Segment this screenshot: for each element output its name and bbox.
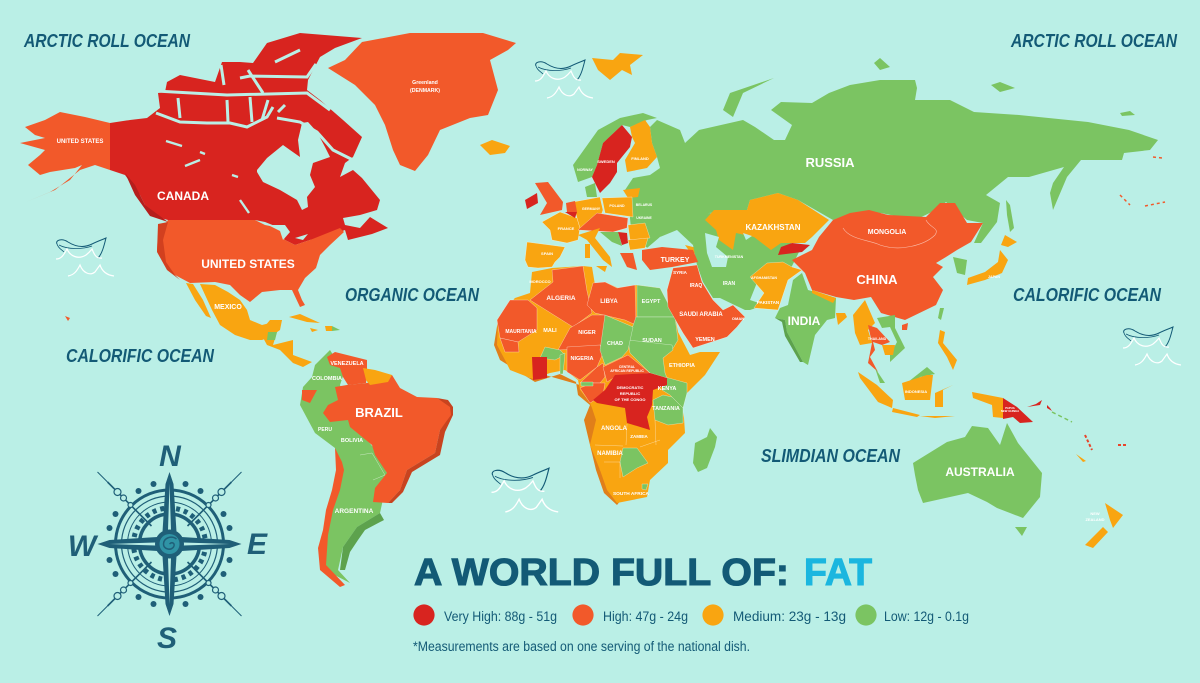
country labels: CHINA: [856, 272, 898, 287]
ocean labels: [23, 31, 1178, 466]
country: Togo: [560, 353, 565, 374]
region: Russia and northern Asia: [625, 58, 1165, 248]
country: Korea: [953, 257, 967, 275]
Arctic islands: [874, 58, 890, 70]
country labels: COLOMBIA: [312, 376, 342, 382]
Solomon Islands: [1052, 412, 1072, 422]
country: Lithuania: [623, 188, 640, 198]
country labels: INDIA: [788, 314, 821, 328]
country: Libya: [587, 282, 636, 325]
Aral Sea: [743, 233, 752, 240]
country: Balkans green: [600, 232, 622, 246]
country: Ivory Coast: [532, 357, 547, 380]
footnote: *Measurements are based on one serving of the national dish.: [413, 639, 750, 654]
country: Madagascar: [693, 428, 717, 472]
country labels: THAILAND: [868, 337, 887, 341]
country: Thailand: [868, 325, 890, 372]
country labels: SWEDEN: [597, 159, 615, 164]
country: Turkey: [642, 247, 698, 270]
legend: low: [855, 604, 969, 626]
icon: whale arctic: [535, 60, 593, 98]
country labels: SOUTH AFRICA: [613, 491, 650, 497]
country labels: PAKISTAN: [757, 300, 779, 305]
country: Botswana: [620, 448, 648, 477]
country labels: UNITED STATES: [57, 139, 103, 145]
country labels: CHAD: [607, 341, 623, 347]
continent base: [497, 266, 720, 503]
legend: low: Low: 12g - 0.1g: [884, 609, 969, 624]
country: Svalbard: [592, 53, 643, 80]
country: Venezuela: [327, 352, 367, 385]
country: Gabon: [580, 383, 605, 403]
country labels: YEMEN: [695, 337, 715, 343]
country labels: INDONESIA: [905, 389, 927, 394]
country: Central African Republic: [603, 355, 650, 382]
country: Norway: [573, 113, 657, 182]
compass letters: [68, 440, 268, 655]
country labels: TANZANIA: [652, 406, 680, 412]
country: Iceland: [480, 140, 510, 155]
country labels: KAZAKHSTAN: [746, 223, 801, 232]
legend: medium: Medium: 23g - 13g: [733, 609, 846, 624]
country: United States: [20, 112, 344, 307]
country: Ecuador: [302, 390, 317, 403]
Central Asia and Iran: [693, 213, 800, 310]
country: Senegal Guinea: [500, 338, 519, 352]
country: Chad: [600, 315, 633, 365]
country: Burkina Faso: [540, 347, 565, 360]
country labels: SYRIA: [673, 270, 688, 275]
country labels: MOROCCO: [529, 279, 551, 284]
compass letters: W: [68, 530, 99, 563]
country labels: SAUDI ARABIA: [679, 312, 723, 318]
country: France: [542, 212, 580, 243]
country labels: TURKMENISTAN: [715, 255, 744, 259]
Sakhalin: [1006, 200, 1014, 232]
country: Cambodia: [882, 345, 895, 355]
country: Indonesia: [858, 372, 1003, 418]
country labels: UKRAINE: [636, 216, 652, 220]
country: Germany: [573, 197, 603, 228]
country labels: BOLIVIA: [341, 438, 363, 444]
title: FAT: [804, 552, 872, 594]
country: Lesotho: [642, 484, 648, 490]
country: Central Europe: [578, 213, 628, 232]
country: DR Congo: [593, 373, 667, 430]
country: Belgium: [565, 212, 577, 218]
icon: whale right: [1123, 327, 1181, 365]
country: Cameroon: [580, 363, 605, 383]
country labels: ALGERIA: [546, 295, 576, 302]
title: A WORLD FULL OF:: [414, 552, 789, 594]
country: Georgia Armenia: [685, 245, 700, 255]
country labels: [57, 80, 1105, 522]
country: China and Mongolia: [792, 203, 983, 320]
Kuril and Aleutian dots: [1120, 157, 1165, 206]
compass letters: E: [247, 528, 268, 561]
country: Chile: [318, 448, 345, 587]
country labels: IRAN: [723, 281, 735, 287]
country: Canada: [110, 33, 388, 245]
country labels: JAPAN: [988, 275, 1000, 279]
country labels: ZAMBIA: [630, 434, 648, 439]
country labels: CENTRAL: [619, 365, 635, 369]
southern Africa borders: [595, 420, 660, 478]
region: Europe: [525, 53, 700, 272]
country: Algeria: [530, 266, 592, 327]
region: Middle East and Central Asia: [642, 193, 829, 348]
Argentina shadow: [340, 513, 384, 570]
countries high fat: [497, 266, 650, 403]
country: Equatorial Guinea: [581, 382, 593, 386]
region: South America: [300, 350, 453, 587]
country labels: AFRICAN REPUBLIC: [610, 369, 644, 373]
country: Australia: [913, 423, 1042, 518]
country labels: EGYPT: [642, 299, 661, 305]
country labels: GERMANY: [582, 207, 601, 211]
legend: high: High: 47g - 24g: [603, 609, 688, 624]
Mongolia border: [843, 220, 936, 248]
country labels: RUSSIA: [805, 155, 855, 170]
Hudson Bay: [257, 122, 330, 210]
region: East and South Asia: [775, 203, 1017, 372]
Arctic channels: [156, 50, 353, 160]
country: Papua New Guinea: [1003, 398, 1052, 423]
country: UK: [535, 182, 563, 215]
country: Fiji and Vanuatu: [1085, 435, 1126, 450]
country labels: ETHIOPIA: [669, 363, 695, 369]
country: Mauritania: [497, 300, 537, 342]
country labels: AUSTRALIA: [945, 465, 1015, 479]
country labels: NAMIBIA: [597, 451, 623, 457]
country labels: NEW GUINEA: [1001, 409, 1019, 413]
country: Denmark: [585, 183, 597, 197]
country labels: KENYA: [658, 386, 676, 392]
country labels: ANGOLA: [601, 426, 628, 432]
country labels: IRAQ: [690, 283, 702, 289]
country: Hainan: [902, 323, 908, 330]
country labels: BELARUS: [636, 203, 653, 207]
country: New Zealand: [1076, 454, 1123, 548]
country labels: NIGERIA: [571, 356, 593, 362]
country: Russia: [625, 80, 1158, 248]
country labels: LIBYA: [600, 299, 618, 305]
country: Kenya: [662, 377, 687, 408]
country: Japan: [967, 235, 1017, 285]
country: Romania: [628, 223, 650, 240]
country: South Sudan: [628, 340, 673, 378]
icon: whale top left: [56, 238, 114, 276]
region: North America: [20, 33, 516, 367]
country labels: CANADA: [157, 189, 209, 203]
country labels: Greenland: [412, 80, 438, 86]
country: Tanzania: [653, 395, 683, 425]
ocean labels: ARCTIC ROLL OCEAN: [1010, 31, 1178, 51]
country labels: PERU: [318, 427, 332, 433]
country labels: TURKEY: [661, 257, 690, 264]
country: Arabia, Iraq, Syria: [667, 265, 745, 348]
ocean labels: ARCTIC ROLL OCEAN: [23, 31, 191, 51]
Caspian Sea: [705, 233, 728, 267]
region: Africa: [494, 266, 720, 505]
country: Philippines: [938, 330, 957, 370]
country labels: MEXICO: [214, 304, 242, 311]
country labels: ARGENTINA: [335, 508, 374, 515]
country labels: SUDAN: [642, 338, 662, 344]
Paraguay border: [360, 453, 385, 480]
compass rose: [98, 472, 242, 616]
country: Kyrgyzstan: [778, 243, 810, 255]
Canadian lakes: [166, 141, 249, 213]
country: Bangladesh: [836, 313, 847, 325]
region: Southeast Asia and Oceania: [858, 330, 1126, 548]
country labels: MALI: [543, 328, 557, 334]
country: Egypt: [637, 285, 675, 317]
country: Mexico: [186, 283, 282, 340]
legend: very high: [413, 604, 557, 626]
legend: high: [572, 604, 688, 626]
country labels: NEW: [1090, 511, 1100, 516]
country: Brazil: [323, 375, 452, 503]
west South America (Colombia, Peru, Bolivia, Argentina): [300, 350, 387, 583]
country: Poland: [602, 197, 633, 217]
country: Afghanistan and Pakistan: [750, 262, 802, 310]
country labels: VENEZUELA: [330, 361, 364, 367]
Brazil shadow: [388, 398, 453, 503]
country: Finland: [625, 120, 657, 172]
country: Nigeria: [567, 345, 603, 380]
ocean labels: CALORIFIC OCEAN: [66, 346, 215, 366]
ocean labels: ORGANIC OCEAN: [345, 285, 480, 305]
country labels: OF THE CONGO: [615, 397, 645, 402]
country: Kazakhstan: [705, 193, 829, 250]
great lakes: [268, 225, 308, 240]
country: Italy: [578, 228, 612, 267]
country labels: DEMOCRATIC: [617, 385, 644, 390]
country: Ireland: [525, 193, 538, 209]
country labels: MAURITANIA: [505, 329, 537, 335]
country labels: POLAND: [609, 204, 625, 208]
country labels: MONGOLIA: [868, 229, 906, 236]
country labels: NORWAY: [577, 168, 593, 172]
country: Sweden: [592, 125, 632, 193]
legend: medium: [702, 604, 846, 626]
country: Sudan: [628, 317, 678, 358]
country: Serbia: [618, 232, 628, 245]
Black Sea: [647, 232, 692, 248]
country labels: PAPUA: [1005, 406, 1015, 410]
India shadow: [775, 318, 803, 362]
Africa shadow: [494, 298, 625, 505]
country labels: FINLAND: [631, 156, 649, 161]
ocean labels: CALORIFIC OCEAN: [1013, 285, 1162, 305]
country labels: FRANCE: [558, 226, 575, 231]
Novaya Zemlya: [723, 78, 774, 117]
country labels: OMAN: [732, 316, 744, 321]
Central America: [65, 314, 340, 367]
legend: [413, 604, 969, 626]
country: Laos and Vietnam: [877, 315, 905, 362]
country: Nepal: [812, 290, 836, 303]
country: Greenland: [328, 33, 516, 171]
country: Bulgaria: [628, 238, 648, 250]
country labels: (DENMARK): [410, 88, 440, 94]
legend: very high: Very High: 88g - 51g: [444, 609, 557, 624]
country: Taiwan: [938, 308, 944, 320]
country labels: ZEALAND: [1085, 517, 1105, 522]
country: Spain: [525, 242, 565, 268]
country labels: NIGER: [578, 330, 596, 336]
country: Tasmania: [1015, 527, 1027, 536]
country: Niger: [558, 315, 605, 350]
Guyanas: [363, 368, 392, 385]
country: Myanmar: [853, 300, 875, 345]
icon: whale south: [492, 468, 558, 512]
country: Greece: [620, 253, 637, 270]
compass letters: N: [159, 440, 182, 473]
country labels: AFGHANISTAN: [751, 276, 777, 280]
country labels: BRAZIL: [355, 405, 403, 420]
country labels: SPAIN: [541, 251, 553, 256]
ocean labels: SLIMDIAN OCEAN: [761, 446, 901, 466]
country: Netherlands: [566, 201, 577, 212]
country: Malaysia: [875, 368, 885, 383]
compass letters: S: [157, 622, 177, 655]
country: India: [775, 273, 836, 365]
country labels: REPUBLIC: [620, 391, 640, 396]
country labels: UNITED STATES: [201, 257, 295, 271]
